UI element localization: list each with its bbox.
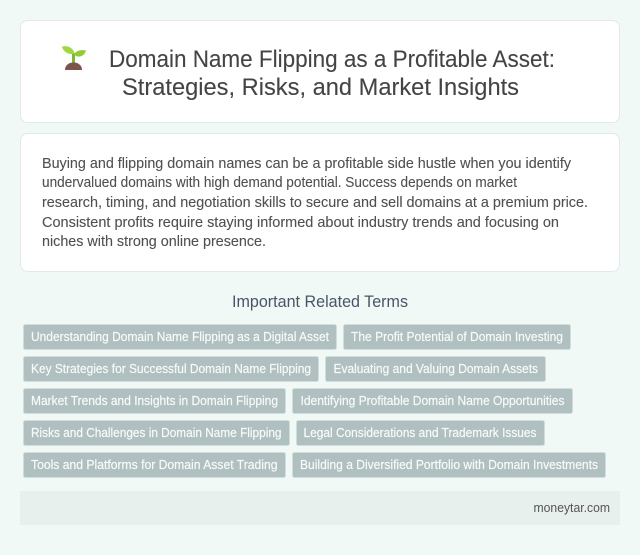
text block: description: niches with strong online presence. [42, 234, 266, 250]
heading: title: Strategies, Risks, and Market Insights [122, 74, 519, 101]
tag: Legal Considerations and Trademark Issues [304, 426, 536, 440]
tag: Evaluating and Valuing Domain Assets [334, 362, 538, 376]
panel: title card [20, 20, 620, 122]
tag [292, 388, 572, 414]
tag: The Profit Potential of Domain Investing [351, 330, 563, 344]
footer [20, 491, 620, 525]
tag: Identifying Profitable Domain Name Opportunities [300, 394, 564, 408]
tag [24, 420, 290, 446]
tag [292, 452, 606, 478]
text block: description: undervalued domains with high demand potential. Success depends on market [42, 175, 517, 191]
tag [24, 324, 336, 350]
text block: description: Buying and flipping domain names can be a profitable side hustle when you identify [42, 156, 572, 172]
panel: description [20, 134, 620, 272]
heading: title: Domain Name Flipping as a Profitable Asset: [109, 46, 555, 73]
text block: description [42, 156, 588, 250]
tag: Building a Diversified Portfolio with Domain Investments [300, 458, 598, 472]
tag list [24, 324, 606, 478]
tag [24, 452, 286, 478]
tag: Key Strategies for Successful Domain Name Flipping [31, 362, 311, 376]
tag [326, 356, 546, 382]
tag: Understanding Domain Name Flipping as a Digital Asset [31, 330, 329, 344]
text block: description: Consistent profits require staying informed about industry trends and focusing on [42, 215, 559, 231]
tag: Market Trends and Insights in Domain Flipping [31, 394, 278, 408]
heading: title [109, 46, 555, 101]
tag [296, 420, 544, 446]
heading: related terms: Important Related Terms [232, 293, 408, 311]
icon: sprout [62, 46, 86, 70]
tag: Risks and Challenges in Domain Name Flipping [31, 426, 282, 440]
text block: description: research, timing, and negotiation skills to secure and sell domains at a premium price. [42, 195, 588, 211]
tag: Tools and Platforms for Domain Asset Trading [31, 458, 278, 472]
tag [24, 388, 286, 414]
tag [344, 324, 570, 350]
tag [24, 356, 318, 382]
footer: site name: moneytar.com [534, 501, 610, 515]
